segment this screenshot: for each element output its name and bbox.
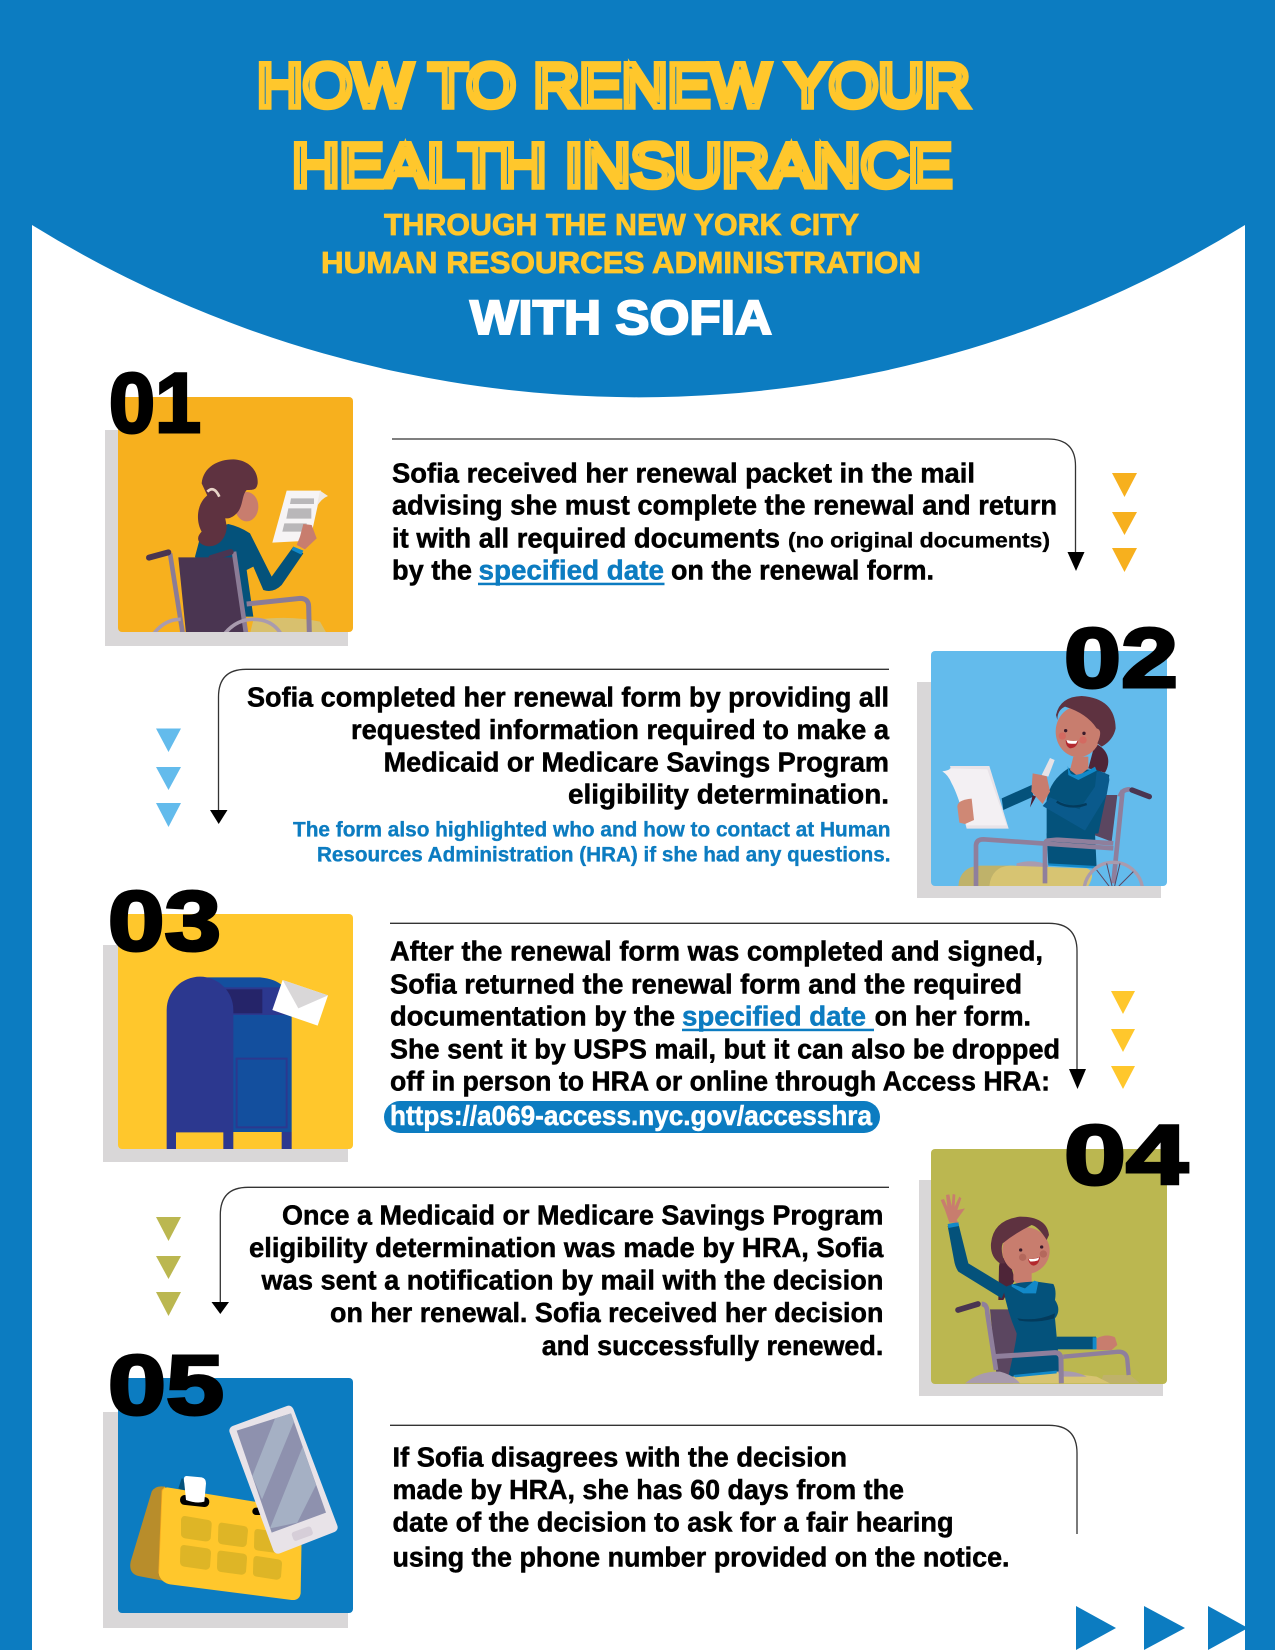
illustration: Sofia filling out the form — [942, 696, 1152, 886]
triangles: step 1 — [1112, 473, 1137, 572]
text: step 3: documentation by the — [390, 1001, 675, 1032]
text: step 5 — [392, 1442, 1010, 1573]
text: step 5: date of the decision to ask for a fair hearing — [392, 1507, 954, 1538]
panel: step 2 — [917, 651, 1167, 921]
text: step 4: and successfully renewed. — [542, 1330, 883, 1361]
note: contact information: The form also highlighted who and how to contact at Human — [293, 819, 890, 842]
text: step 3: on her form. — [875, 1001, 1031, 1032]
note: contact information — [293, 819, 890, 867]
text: step 1 — [392, 458, 1057, 586]
link pill: Access HRA URL: https://a069-access.nyc.gov/accesshra — [390, 1100, 873, 1131]
illustration: Sofia waving — [941, 1194, 1140, 1383]
arrows: bottom right — [1076, 1606, 1248, 1650]
text: step 1: on the renewal form. — [671, 555, 934, 586]
text: step 1: specified date — [478, 555, 664, 586]
number 01: 01 — [109, 356, 201, 450]
arrow connector: step 2 — [210, 669, 889, 824]
text: step 4 — [249, 1200, 884, 1361]
text: step 5: made by HRA, she has 60 days from the — [392, 1474, 904, 1505]
subtitle: HUMAN RESOURCES ADMINISTRATION — [321, 245, 921, 280]
number 04: 04 — [1064, 1108, 1188, 1202]
text: step 1: by the — [392, 555, 472, 586]
title — [257, 52, 970, 200]
note: contact information: Resources Administration (HRA) if she had any questions. — [317, 844, 890, 867]
text: step 4: was sent a notification by mail with the decision — [261, 1265, 883, 1296]
illustration: mailbox with envelope — [167, 977, 328, 1149]
title: HOW TO RENEW YOUR — [257, 52, 970, 120]
text: step 3: specified date — [682, 1001, 866, 1032]
text: step 3: After the renewal form was completed and signed, — [390, 936, 1043, 967]
text: step 3 — [384, 936, 1060, 1133]
text: step 1: Sofia received her renewal packet in the mail — [392, 458, 975, 489]
text: step 2: requested information required to make a — [351, 714, 890, 745]
number 05: 05 — [108, 1338, 224, 1432]
panel: step 5 — [103, 1378, 353, 1628]
text: step 3: off in person to HRA or online through Access HRA: — [390, 1066, 1050, 1097]
text: step 2: eligibility determination. — [568, 779, 889, 810]
text: step 1: (no original documents) — [788, 530, 1050, 553]
triangles: step 4 — [156, 1217, 181, 1316]
illustration: Sofia reading from behind — [149, 459, 328, 633]
text: step 5: If Sofia disagrees with the decision — [392, 1442, 847, 1473]
title: HEALTH INSURANCE — [292, 132, 952, 200]
title: HEALTH INSURANCE — [292, 132, 952, 200]
title: HOW TO RENEW YOUR — [257, 52, 970, 120]
text: step 3: She sent it by USPS mail, but it can also be dropped — [390, 1033, 1060, 1064]
panel: step 4 — [919, 1149, 1167, 1396]
connector line: step 5 — [390, 1425, 1077, 1534]
illustration: calendar and phone — [130, 1411, 333, 1600]
heading: with Sofia: WITH SOFIA — [470, 292, 772, 345]
text: step 2: Medicaid or Medicare Savings Program — [384, 747, 889, 778]
text: step 1: it with all required documents — [392, 523, 780, 554]
arrow connector: step 3 — [390, 923, 1086, 1089]
text: step 2 — [247, 682, 890, 867]
text: step 5: using the phone number provided on the notice. — [392, 1542, 1010, 1573]
triangles: step 3 — [1111, 991, 1135, 1089]
subtitle: THROUGH THE NEW YORK CITY — [384, 207, 859, 242]
text: step 4: Once a Medicaid or Medicare Savings Program — [282, 1200, 883, 1231]
arrow connector: step 4 — [212, 1187, 889, 1314]
text: step 4: eligibility determination was made by HRA, Sofia — [249, 1232, 884, 1263]
panel: step 3 — [103, 914, 353, 1162]
text: step 4: on her renewal. Sofia received her decision — [330, 1297, 883, 1328]
text: step 3: Sofia returned the renewal form and the required — [390, 968, 1022, 999]
text: step 2: Sofia completed her renewal form by providing all — [247, 682, 889, 713]
panel: step 1 — [105, 397, 353, 646]
number 03: 03 — [108, 874, 221, 968]
subtitle — [321, 207, 921, 280]
arrow connector: step 1 — [392, 439, 1084, 571]
text: step 1: advising she must complete the renewal and return — [392, 490, 1057, 521]
triangles: step 2 — [156, 728, 181, 827]
number 02: 02 — [1064, 611, 1178, 705]
